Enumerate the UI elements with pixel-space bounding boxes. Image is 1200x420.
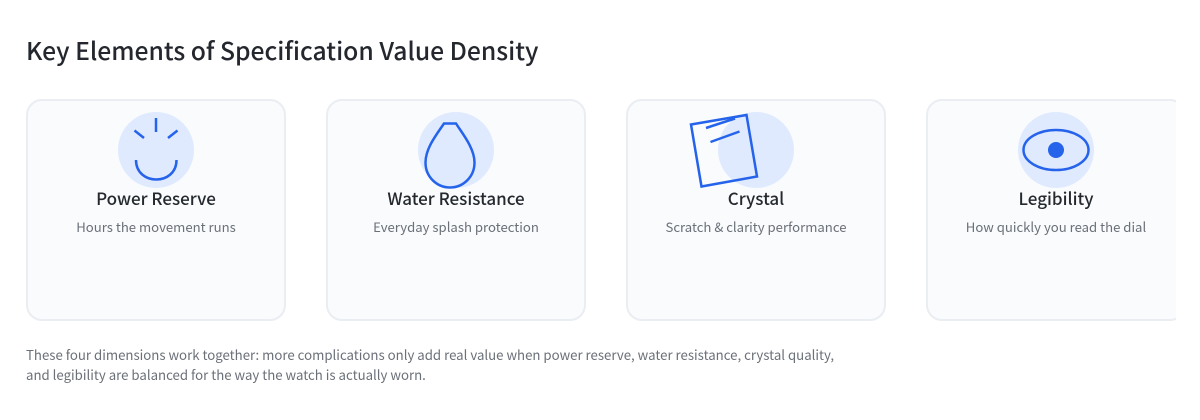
panel background bbox=[926, 99, 1186, 321]
heading: Water Resistance bbox=[387, 185, 525, 210]
description: Hours the movement runs bbox=[76, 217, 236, 236]
panel: water resistance bbox=[326, 99, 586, 321]
icon: water drop bbox=[418, 112, 494, 189]
footnote: These four dimensions work together: more complications only add real value when power reserve, water resistance, crystal quality, bbox=[26, 345, 834, 364]
panel background bbox=[26, 99, 286, 321]
heading: Power Reserve bbox=[96, 185, 216, 210]
footnote bbox=[26, 345, 834, 384]
description: Scratch & clarity performance bbox=[666, 217, 846, 236]
heading: Crystal bbox=[728, 185, 784, 210]
panel: legibility bbox=[926, 99, 1176, 321]
panel: power reserve bbox=[26, 99, 286, 321]
description: How quickly you read the dial bbox=[966, 217, 1146, 236]
heading: Legibility bbox=[1019, 185, 1093, 210]
icon: eye bbox=[1018, 112, 1094, 188]
description: Everyday splash protection bbox=[373, 217, 539, 236]
icon: power reserve bbox=[118, 112, 194, 188]
panel background bbox=[626, 99, 886, 321]
panel: crystal bbox=[626, 99, 886, 321]
title: Key Elements of Specification Value Density bbox=[26, 32, 538, 68]
icon: crystal bbox=[690, 112, 794, 188]
panel background bbox=[326, 99, 586, 321]
footnote: and legibility are balanced for the way the watch is actually worn. bbox=[26, 365, 426, 384]
